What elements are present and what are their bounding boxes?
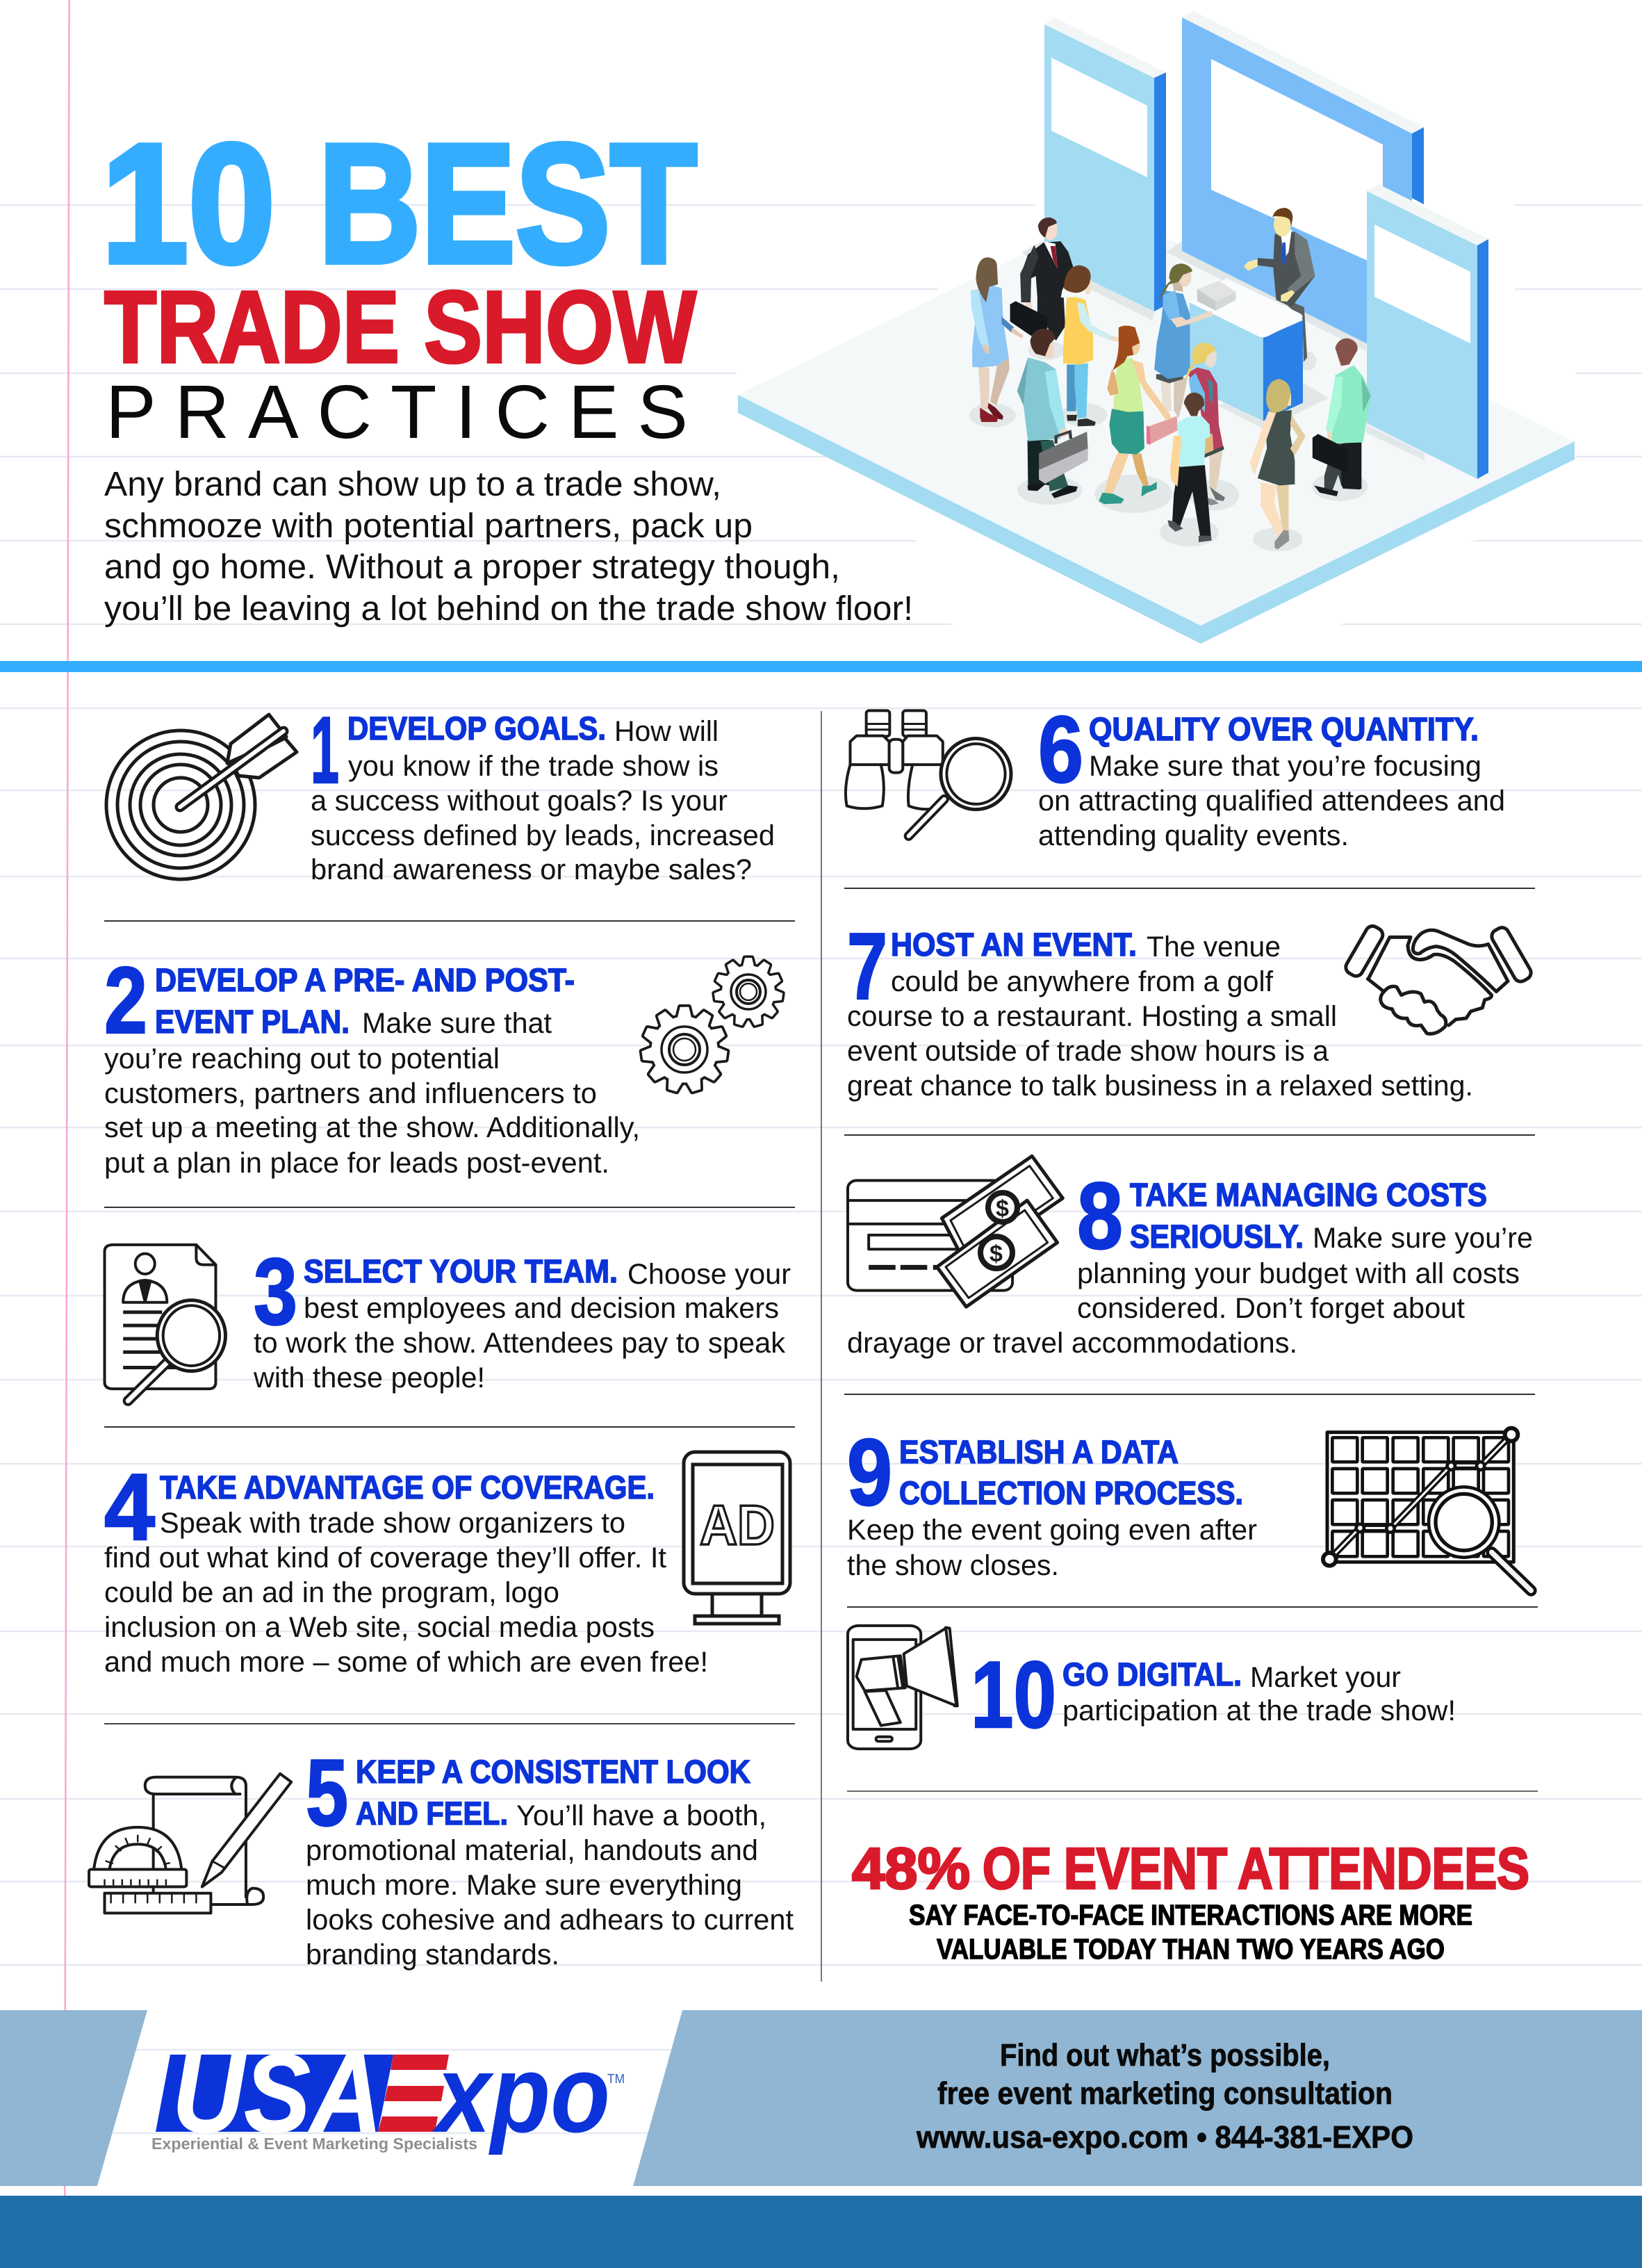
- panel: tip 7 host an event: [847, 913, 1534, 1102]
- footer contact text: [916, 2037, 1413, 2155]
- number 3: 3: [254, 1239, 297, 1344]
- statistic heading: 48%: [852, 1836, 970, 1901]
- body text: [847, 930, 1473, 1102]
- title line: PRACTICES: PRACTICES: [106, 370, 688, 455]
- woman in dark dress: [1250, 379, 1306, 549]
- icon: credit card and dollar bills: $: [996, 1196, 1009, 1222]
- body text: attending quality events.: [1038, 819, 1349, 851]
- body text: brand awareness or maybe sales?: [311, 853, 752, 886]
- body text: on attracting qualified attendees and: [1038, 784, 1505, 817]
- heading: EVENT PLAN.: [155, 1003, 350, 1040]
- logo: red E stripes: [378, 2055, 449, 2132]
- people and counter: [969, 208, 1371, 551]
- body text: Make sure that you’re focusing: [1089, 749, 1481, 782]
- icon: gears: [641, 958, 783, 1093]
- body text: [1038, 749, 1505, 851]
- title line: TRADE SHOW: [104, 270, 696, 384]
- body text: Choose your: [627, 1257, 791, 1290]
- body text: customers, partners and influencers to: [104, 1077, 597, 1109]
- heading: ESTABLISH A DATA: [899, 1433, 1179, 1470]
- statistic heading: OF: [983, 1836, 1051, 1901]
- footer contact text: www.usa-expo.com • 844-381-EXPO: [916, 2119, 1413, 2155]
- number 2: 2: [104, 947, 147, 1053]
- heading: SERIOUSLY.: [1130, 1218, 1304, 1255]
- body text: the show closes.: [847, 1549, 1059, 1581]
- heading: [1130, 1176, 1487, 1255]
- illustration: isometric trade show booth with visitors: [738, 11, 1575, 644]
- body text: success defined by leads, increased: [311, 819, 775, 851]
- woman in light blue dress: [971, 257, 1024, 422]
- reception counter: [1190, 279, 1303, 421]
- body text: put a plan in place for leads post-event.: [104, 1146, 609, 1179]
- title: [101, 108, 697, 455]
- icon: AD display stand: [684, 1452, 790, 1624]
- body text: [306, 1799, 794, 1971]
- panel: tip 8 take managing costs seriously: [847, 1156, 1533, 1359]
- title line: 10 BEST: [101, 108, 697, 298]
- woman with ponytail, green skirt and pink bag: [1099, 326, 1178, 504]
- number 4: 4: [104, 1454, 155, 1560]
- icon: data grid chart with magnifier: [1323, 1428, 1531, 1590]
- icon: handshake: [1343, 924, 1534, 1034]
- heading: QUALITY OVER QUANTITY.: [1089, 710, 1479, 747]
- body text: How will: [614, 715, 719, 747]
- logo: USA Expo: TM: [607, 2072, 625, 2087]
- panel: tip 2 pre- and post-event plan: [104, 947, 783, 1179]
- footer contact text: free event marketing consultation: [937, 2075, 1393, 2111]
- panel: tip 1 develop goals: [106, 697, 775, 886]
- title line: TRADE SHOW: TRADE: [104, 270, 400, 384]
- body text: could be anywhere from a golf: [891, 965, 1273, 997]
- body text: considered. Don’t forget about: [1077, 1291, 1465, 1324]
- icon: resume with magnifier: [105, 1245, 225, 1401]
- body text: Keep the event going even after: [847, 1513, 1257, 1546]
- body text: and much more – some of which are even free!: [104, 1645, 708, 1678]
- footer band: [0, 2010, 1642, 2268]
- logo: USA Expo: [151, 2031, 625, 2156]
- logo: USA Expo: xpo: [432, 2032, 610, 2155]
- heading: AND FEEL.: [356, 1795, 508, 1831]
- woman with blue dress at counter: [1154, 263, 1213, 418]
- number 1: 1: [311, 697, 339, 803]
- icon: scroll, protractor, ruler and pencil: [89, 1774, 291, 1913]
- body text: a success without goals? Is your: [311, 784, 728, 817]
- number 9: 9: [847, 1419, 892, 1525]
- body text: [253, 1257, 791, 1394]
- body text: You’ll have a booth,: [516, 1799, 766, 1831]
- staff man behind counter: [1244, 208, 1315, 362]
- body text: planning your budget with all costs: [1077, 1257, 1520, 1289]
- body text: Make sure you’re: [1313, 1221, 1533, 1254]
- panel: tip 9 establish a data collection process: [847, 1419, 1531, 1590]
- heading: TAKE ADVANTAGE OF COVERAGE.: [160, 1469, 655, 1506]
- intro text: you’ll be leaving a lot behind on the trade show floor!: [104, 589, 913, 628]
- body text: branding standards.: [306, 1938, 559, 1971]
- body text: inclusion on a Web site, social media posts: [104, 1610, 655, 1643]
- icon: binoculars with magnifier: [846, 710, 1011, 836]
- boy in light blue shirt: [1167, 393, 1212, 542]
- panel: tip 10 go digital: [848, 1626, 1456, 1749]
- left booth panel: [1044, 17, 1166, 311]
- body text: drayage or travel accommodations.: [847, 1326, 1297, 1359]
- logo: USA Expo: Experiential & Event Marketing Specialists: [151, 2135, 477, 2153]
- statistic description: SAY FACE-TO-FACE INTERACTIONS ARE MORE: [909, 1899, 1472, 1931]
- body text: The venue: [1147, 930, 1281, 963]
- number 7: 7: [847, 913, 887, 1019]
- heading: [155, 961, 575, 1040]
- statistic heading: [852, 1836, 1529, 1901]
- panel: tip 4 take advantage of coverage: [104, 1452, 790, 1678]
- heading: DEVELOP GOALS.: [347, 710, 606, 747]
- intro text: [104, 465, 913, 628]
- body text: Make sure that: [362, 1006, 552, 1039]
- body text: [104, 1006, 640, 1179]
- number 8: 8: [1077, 1163, 1123, 1268]
- heading: [356, 1753, 750, 1831]
- heading: COLLECTION PROCESS.: [899, 1474, 1243, 1511]
- icon: phone with megaphone: [848, 1626, 958, 1749]
- body text: Market your: [1250, 1661, 1401, 1693]
- statistic description: VALUABLE TODAY THAN TWO YEARS AGO: [937, 1933, 1445, 1965]
- icon: AD display stand: AD: [700, 1494, 775, 1557]
- heading: HOST AN EVENT.: [891, 926, 1137, 963]
- title line: TRADE SHOW: SHOW: [424, 270, 696, 384]
- number 6: 6: [1038, 696, 1083, 802]
- body text: set up a meeting at the show. Additionally,: [104, 1111, 640, 1143]
- statistic description: [909, 1899, 1472, 1965]
- intro text: and go home. Without a proper strategy though,: [104, 548, 840, 586]
- number 5: 5: [306, 1740, 348, 1845]
- woman in yellow vest: [1063, 266, 1119, 426]
- intro text: schmooze with potential partners, pack up: [104, 507, 753, 545]
- body text: could be an ad in the program, logo: [104, 1576, 559, 1608]
- man in black suit with briefcase: [1010, 218, 1073, 341]
- callout: 48% statistic: [852, 1836, 1529, 1965]
- heading: KEEP A CONSISTENT LOOK: [356, 1753, 750, 1790]
- footer contact text: Find out what’s possible,: [1000, 2037, 1330, 2073]
- body text: [311, 715, 775, 886]
- man in teal shirt with grey briefcase: [1017, 329, 1088, 498]
- woman with red vest: [1185, 343, 1225, 505]
- body text: much more. Make sure everything: [306, 1868, 742, 1901]
- icon: credit card and dollar bills: $: [990, 1241, 1003, 1267]
- heading: SELECT YOUR TEAM.: [304, 1253, 618, 1289]
- body text: course to a restaurant. Hosting a small: [847, 1000, 1337, 1032]
- body text: looks cohesive and adhears to current: [306, 1903, 794, 1936]
- statistic heading: EVENT: [1064, 1836, 1227, 1901]
- body text: promotional material, handouts and: [306, 1834, 758, 1866]
- heading: GO DIGITAL.: [1062, 1656, 1242, 1692]
- statistic heading: ATTENDEES: [1238, 1836, 1529, 1901]
- body text: with these people!: [253, 1361, 485, 1394]
- heading: DEVELOP A PRE- AND POST-: [155, 961, 575, 998]
- man in mint shirt with black briefcase: [1313, 338, 1371, 496]
- body text: best employees and decision makers: [304, 1291, 779, 1324]
- centre booth panel: [1182, 11, 1424, 366]
- panel: tip 6 quality over quantity: [846, 696, 1505, 851]
- body text: [104, 1506, 708, 1678]
- panel floor shadows: [1022, 240, 1425, 460]
- logo: blue block with white USA letters: USA: [172, 2031, 382, 2156]
- panel: tip 5 keep a consistent look and feel: [89, 1740, 794, 1971]
- body text: Speak with trade show organizers to: [160, 1506, 625, 1539]
- body text: [847, 1221, 1533, 1359]
- body text: to work the show. Attendees pay to speak: [254, 1326, 785, 1359]
- panel: tip 3 select your team: [105, 1239, 791, 1401]
- title line: 10 BEST: 10: [101, 108, 275, 298]
- title line: 10 BEST: BEST: [318, 108, 697, 298]
- body text: you’re reaching out to potential: [104, 1042, 500, 1075]
- body text: participation at the trade show!: [1062, 1694, 1456, 1727]
- intro text: Any brand can show up to a trade show,: [104, 465, 721, 503]
- booth floor: [738, 211, 1575, 644]
- heading: [899, 1433, 1243, 1511]
- body text: event outside of trade show hours is a: [847, 1034, 1329, 1067]
- body text: find out what kind of coverage they’ll offer. It: [104, 1541, 666, 1574]
- heading: TAKE MANAGING COSTS: [1130, 1176, 1487, 1213]
- number 10: 10: [971, 1642, 1056, 1747]
- icon: target with arrow: [106, 715, 297, 879]
- body text: you know if the trade show is: [348, 749, 719, 782]
- body text: [1062, 1661, 1456, 1727]
- body text: great chance to talk business in a relaxed setting.: [847, 1069, 1473, 1102]
- icon: credit card and dollar bills: [848, 1156, 1062, 1307]
- right booth panel: [1367, 184, 1488, 479]
- body text: [847, 1513, 1257, 1581]
